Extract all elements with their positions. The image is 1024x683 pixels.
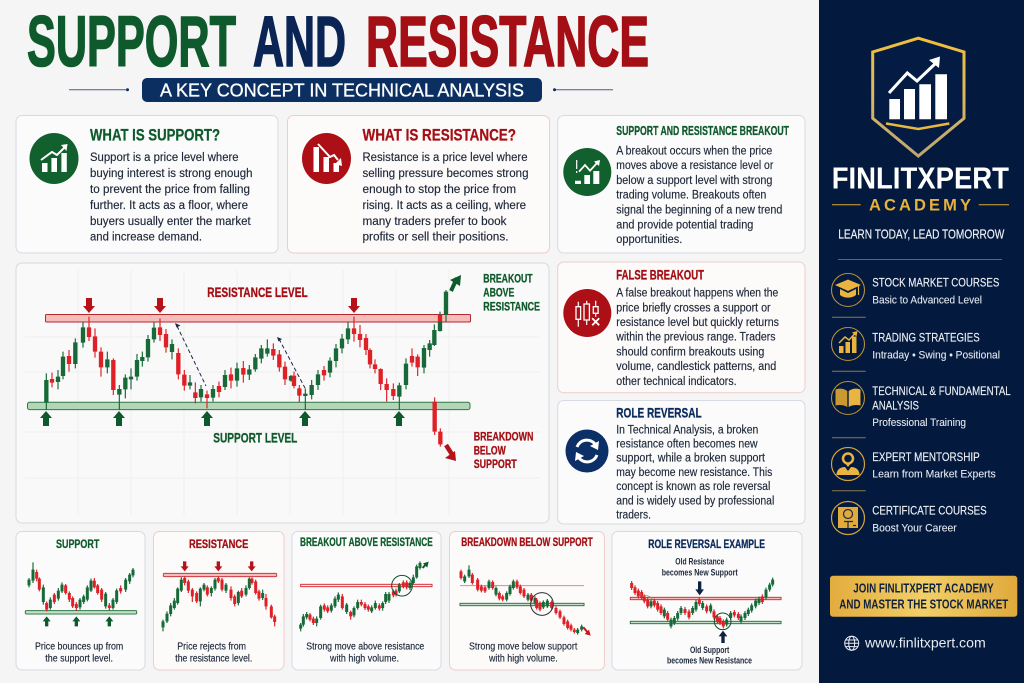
- text block: below a support level with strong: [616, 175, 772, 187]
- text block: A breakout occurs when the price: [616, 145, 772, 157]
- arrow: breakout: [450, 275, 461, 291]
- item: expert mentorship: [832, 448, 996, 481]
- arrows: support bounces: [40, 411, 405, 426]
- item title: ANALYSIS: [872, 398, 919, 412]
- panel: breakout: [558, 116, 805, 253]
- heading: SUPPORT AND RESISTANCE BREAKOUT: [616, 123, 789, 138]
- label: old resistance: Old Resistance: [675, 557, 724, 568]
- caption: Strong move below support: [469, 642, 577, 653]
- text block: moves above a resistance level or: [616, 160, 773, 172]
- label: breakout above resistance: [483, 271, 540, 314]
- heading: FALSE BREAKOUT: [616, 266, 704, 282]
- text block: and increase demand.: [90, 232, 202, 244]
- panel: main chart: [16, 263, 549, 523]
- icon: mentor: [832, 448, 864, 480]
- text block: volume, candlestick patterns, and: [616, 361, 776, 373]
- caption: the support level.: [45, 653, 113, 664]
- item subtitle: Professional Training: [872, 417, 966, 429]
- text block: In Technical Analysis, a broken: [616, 424, 758, 436]
- heading: RESISTANCE: [189, 537, 248, 551]
- text block: price briefly crosses a support or: [616, 302, 771, 314]
- text block: traders.: [616, 510, 651, 522]
- text block: buying interest is strong enough: [90, 168, 252, 180]
- text block: [362, 152, 528, 244]
- mini panel: breakdown below support: [450, 532, 604, 670]
- item title: [872, 384, 1011, 412]
- dashed retest arrows: [175, 323, 305, 388]
- title: SUPPORT: [27, 3, 236, 82]
- mini chart: [163, 561, 277, 631]
- call to action button: [830, 576, 1017, 617]
- text block: to prevent the price from falling: [90, 184, 250, 196]
- heading: WHAT IS SUPPORT?: [90, 126, 220, 145]
- item title: EXPERT MENTORSHIP: [872, 450, 980, 464]
- text block: should confirm breakouts using: [616, 346, 764, 358]
- text block: further. It acts as a floor, where: [90, 200, 248, 212]
- text block: [616, 145, 782, 246]
- caption: [175, 642, 252, 664]
- text block: within the previous range. Traders: [615, 332, 776, 344]
- caption: [306, 642, 425, 664]
- label: support level: SUPPORT LEVEL: [213, 431, 297, 446]
- arrow: breakdown: [445, 445, 456, 461]
- heading: WHAT IS RESISTANCE?: [362, 126, 516, 145]
- text block: resistance level but quickly returns: [616, 317, 779, 329]
- caption: the resistance level.: [175, 653, 252, 664]
- arrows: resistance touches: [83, 298, 360, 313]
- caption: with high volume.: [329, 653, 399, 664]
- mini panel: resistance: [154, 532, 284, 670]
- academy label: ACADEMY: [869, 197, 971, 215]
- text block: resistance often becomes new: [616, 438, 758, 450]
- caption: [35, 642, 123, 664]
- text block: and is widely used by professional: [616, 495, 774, 507]
- text block: opportunities.: [616, 234, 682, 246]
- text block: may become new resistance. This: [616, 467, 773, 479]
- text block: concept is known as role reversal: [616, 481, 770, 493]
- icon: chart: [832, 328, 864, 360]
- item: stock market courses: [832, 274, 999, 306]
- label: resistance level: RESISTANCE LEVEL: [207, 285, 308, 300]
- text block: A false breakout happens when the: [616, 288, 778, 300]
- item subtitle: Learn from Market Experts: [872, 469, 996, 481]
- text block: buyers usually enter the market: [90, 216, 251, 228]
- icon: circular arrows: [566, 430, 608, 472]
- item title: CERTIFICATE COURSES: [872, 503, 987, 517]
- label: old support: becomes New Resistance: [667, 656, 752, 667]
- label: old support: Old Support: [690, 645, 730, 656]
- caption: [469, 642, 577, 664]
- item subtitle: Boost Your Career: [872, 523, 957, 535]
- item title: TRADING STRATEGIES: [872, 330, 980, 344]
- text block: Support is a price level where: [90, 152, 239, 164]
- item subtitle: Intraday • Swing • Positional: [872, 349, 1000, 361]
- heading: SUPPORT: [56, 537, 100, 551]
- icon: graduation cap: [832, 274, 864, 306]
- caption: Price bounces up from: [35, 642, 123, 653]
- icon: globe: [845, 636, 859, 650]
- panel: what is resistance: [288, 116, 550, 253]
- item: technical and fundamental analysis: [832, 382, 1011, 429]
- item: trading strategies: [832, 328, 1000, 361]
- text block: signal the beginning of a new trend: [616, 204, 782, 216]
- label: breakout above resistance: RESISTANCE: [483, 300, 540, 314]
- support band: [28, 402, 470, 410]
- mini chart: [630, 578, 781, 643]
- label: old resistance: [662, 557, 738, 579]
- resistance band: [46, 314, 470, 322]
- item subtitle: Basic to Advanced Level: [872, 294, 982, 306]
- website: www.finlitxpert.com: [864, 635, 986, 651]
- icon: open book: [832, 382, 864, 414]
- subtitle banner: [69, 78, 613, 102]
- text block: profits or sell their positions.: [362, 232, 508, 244]
- icon: candles with cross: [563, 289, 611, 337]
- mini panel: role reversal example: [612, 532, 802, 670]
- heading: ROLE REVERSAL: [616, 404, 702, 420]
- label: breakdown below support: BREAKDOWN: [474, 429, 533, 443]
- mini chart: [25, 562, 137, 626]
- caption: Price rejects from: [177, 642, 246, 653]
- icon: certificate: [832, 502, 864, 534]
- mini chart: [460, 565, 591, 636]
- text block: enough to stop the price from: [362, 184, 516, 196]
- text block: trading volume. Breakouts often: [616, 190, 766, 202]
- text block: [615, 288, 779, 388]
- text block: rising. It acts as a ceiling, where: [362, 200, 526, 212]
- mini panel: support: [16, 532, 145, 670]
- subtitle banner: A KEY CONCEPT IN TECHNICAL ANALYSIS: [160, 80, 524, 100]
- label: old resistance: becomes New Support: [662, 568, 738, 579]
- title: RESISTANCE: [366, 3, 649, 82]
- mini chart: [301, 561, 432, 631]
- icon: falling chart: [302, 133, 351, 184]
- heading: BREAKOUT ABOVE RESISTANCE: [300, 535, 433, 549]
- text block: selling pressure becomes strong: [362, 168, 528, 180]
- text block: [616, 424, 774, 522]
- text block: and provide potential trading: [616, 219, 753, 231]
- caption: Strong move above resistance: [306, 642, 425, 653]
- panel: role reversal: [558, 400, 805, 524]
- panel: what is support: [16, 116, 278, 253]
- text block: other technical indicators.: [616, 376, 737, 388]
- icon: rising chart: [30, 133, 78, 184]
- text block: Resistance is a price level where: [362, 152, 528, 164]
- text block: many traders prefer to book: [362, 216, 507, 228]
- sidebar: [819, 0, 1024, 683]
- heading: ROLE REVERSAL EXAMPLE: [648, 537, 765, 551]
- panel: false breakout: [558, 262, 805, 393]
- label: breakdown below support: [474, 429, 533, 471]
- heading: BREAKDOWN BELOW SUPPORT: [461, 535, 593, 549]
- label: breakdown below support: SUPPORT: [474, 457, 517, 471]
- label: breakout above resistance: BREAKOUT: [483, 271, 533, 285]
- label: breakout above resistance: ABOVE: [483, 286, 514, 300]
- text block: [90, 152, 252, 244]
- text block: support, while a broken support: [616, 453, 766, 465]
- label: breakdown below support: BELOW: [474, 443, 506, 457]
- candlesticks: main: [46, 290, 446, 447]
- title: AND: [253, 3, 346, 82]
- item: certificate courses: [832, 502, 987, 535]
- title: [27, 3, 649, 82]
- label: old support: [667, 645, 752, 667]
- mini panel: breakout above resistance: [292, 532, 441, 670]
- logo: shield: [873, 38, 964, 156]
- caption: with high volume.: [488, 653, 558, 664]
- icon: breakout chart: [563, 148, 611, 196]
